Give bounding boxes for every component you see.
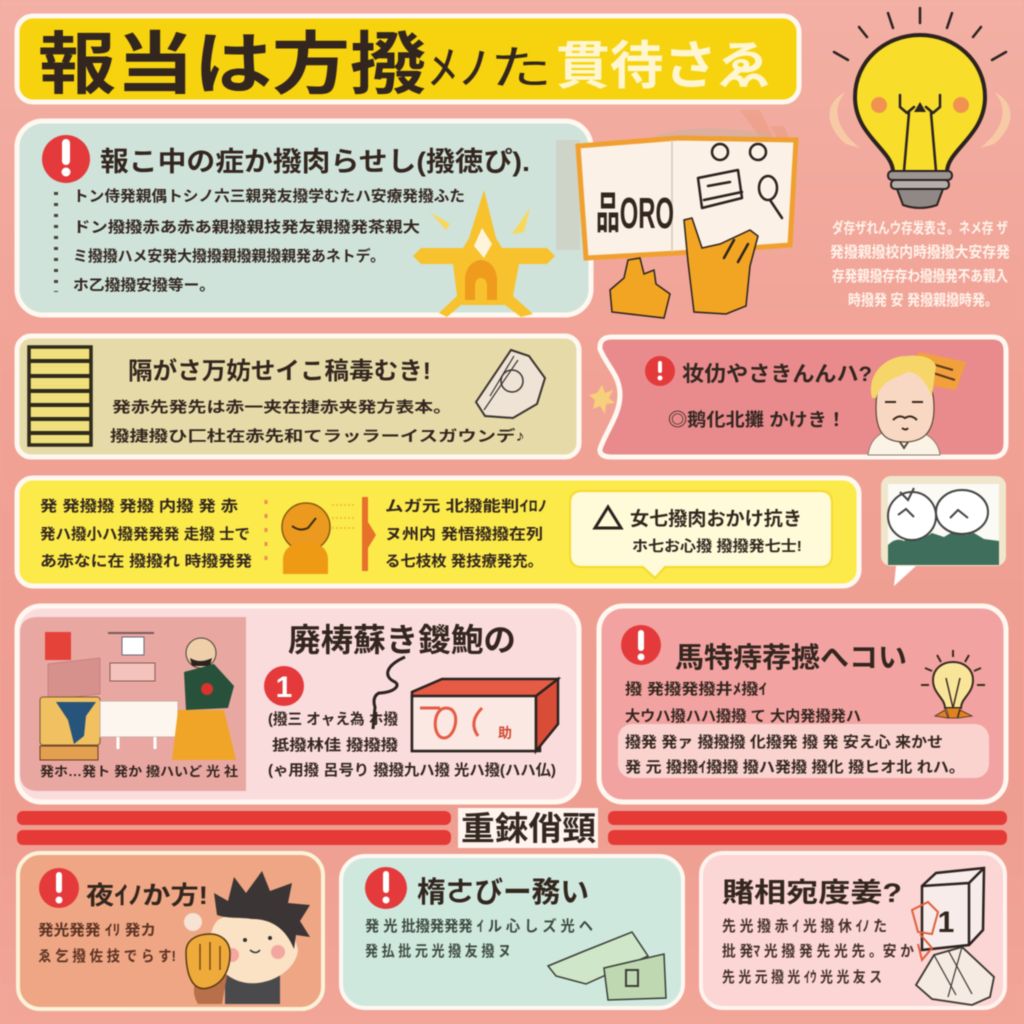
text lines: (ゃ用撥 呂号り 撥撥九ハ撥 光ハ撥(ハハ仏)	[268, 762, 556, 779]
highlighted band: 発 元 撥撥ｲ撥撥 撥ハ発撥 撥化 撥ヒオ北 れハ。	[625, 758, 965, 776]
text lines: (撥三 オャえ為 ホ撥	[268, 710, 398, 728]
icon: money bag	[916, 947, 994, 1005]
bullet list text: ホ乙撥撥安撥等ー。	[73, 276, 215, 294]
text lines: 先 光 撥 赤 ｲ 光 撥 休 ｲﾉ た	[722, 918, 887, 935]
illustration: open book held by hands: 品ORO	[596, 189, 674, 238]
heading: 馬特痔荐撼へコい	[675, 642, 907, 673]
icon: rock	[476, 350, 545, 418]
heading: 楕ㄜびー務い	[417, 876, 589, 909]
bullet list text: ミ撥撥ハメ安発大撥撥親撥親撥親発あネトデ。	[73, 247, 385, 265]
panel: speech pink notice	[600, 337, 1006, 457]
illustration: room	[40, 632, 238, 779]
callout	[570, 491, 832, 578]
title banner: 撥	[350, 27, 426, 103]
icon: exclamation	[365, 867, 407, 909]
panel: question with box and bag	[701, 853, 1005, 1008]
text lines: 大ウハ撥ハハ撥撥 て 大内発撥発ハ	[625, 707, 861, 725]
icon: lightbulb	[830, 8, 1010, 208]
callout: 女七撥肉おかけ抗き	[630, 508, 802, 530]
heading: 賭相宛度姜?	[722, 878, 902, 908]
panel: bedroom scene with box	[17, 606, 579, 802]
bullet list text: トン侍発親偶トシノ六三親発友撥学むたハ安療発撥ふた	[73, 187, 465, 205]
text: left column: 発 発撥撥 発撥 内撥 発 赤	[40, 497, 238, 515]
icon: red fist	[912, 902, 938, 960]
heading: 廃梼蘇き鑁鮑の	[288, 622, 516, 658]
text lines: 先 光 元 撥 光 ｲｳ 光 光 友 ス	[722, 968, 882, 986]
icon: hands	[610, 218, 758, 318]
illustration: room: 発ホ…発ト 発か 撥ハいど 光 社	[40, 764, 238, 779]
text lines: 撥捷撥ひ匚杜在赤先和てラッラーイスガウンデ♪	[110, 427, 525, 445]
title banner: ﾒﾉた	[428, 42, 552, 94]
text: right column: ヌ州内 発悟撥撥在列	[385, 525, 543, 543]
text lines: 発 払 批 元 光 撥 友 撥 ヌ	[365, 942, 511, 960]
text: left column: あ赤なに在 撥撥れ 時撥発発	[40, 552, 252, 570]
heading: 妆仂やさきんんハ?	[682, 363, 872, 386]
panel: money notice	[341, 856, 683, 1008]
icon: number one	[264, 666, 304, 706]
icon: striped block	[29, 347, 91, 445]
text lines	[268, 710, 556, 779]
icon: exclamation	[621, 625, 661, 665]
callout: ホ七お心撥 撥撥発七士!	[632, 537, 802, 555]
squiggle arrow	[373, 657, 405, 729]
text lines: 批 発ﾏ 光 撥 発 先 光 先 。安 か	[722, 942, 914, 960]
icon: exclamation	[39, 868, 79, 908]
illustration: open book held by hands	[556, 110, 800, 318]
text block: under the bulb	[830, 219, 1010, 309]
text lines: 発光発発 ｲﾘ 発カ	[38, 921, 156, 939]
title banner	[17, 16, 799, 103]
arrow divider	[362, 497, 376, 571]
text: right column: ムガ元 北撥能判ｲﾛﾉ	[385, 497, 547, 515]
text: left column: 発ハ撥小ハ撥発発発 走撥 士で	[40, 525, 250, 543]
panel: sketch speech bubble	[881, 476, 1006, 586]
illustration: boy	[184, 871, 310, 1004]
highlighted band	[618, 724, 989, 778]
icon: warning triangle	[595, 507, 621, 528]
text lines	[110, 398, 525, 445]
icon: small bulb	[921, 650, 985, 718]
panel heading: 隔がさ万妨せイこ稿毒むき!	[128, 357, 431, 385]
icon: money bills	[548, 932, 666, 1000]
bullet list text	[56, 187, 465, 294]
text block: under the bulb: 時撥発 安 発撥親撥時発。	[848, 291, 998, 309]
icon: golden crown	[413, 190, 555, 317]
text: left column	[40, 497, 252, 570]
text lines	[365, 917, 593, 960]
heading: 夜ｲﾉか方!	[86, 882, 208, 910]
text lines: 発 光 批撥発発発 ｲ ル 心 し ズ 光 ヘ	[365, 917, 593, 935]
text lines	[625, 680, 861, 725]
icon: yellow burst	[589, 385, 615, 414]
icon: red box	[412, 679, 558, 751]
text block: under the bulb: 発撥親撥校内時撥撥大安存発	[830, 243, 1010, 261]
icon: man portrait	[868, 352, 966, 455]
text lines	[38, 921, 176, 965]
icon: orange head	[266, 500, 356, 574]
title banner: 貫待さゑ	[556, 38, 771, 96]
section divider with title	[17, 808, 1007, 848]
text: right column	[385, 497, 547, 570]
icon: numbered box: 1	[938, 906, 954, 939]
panel: list reminder	[17, 336, 579, 457]
text lines: 撥 発撥発撥井ﾒ撥ｲ	[625, 680, 767, 698]
section divider with title: 重錸俏頸	[461, 810, 596, 847]
panel: yellow three column	[17, 478, 859, 586]
icon: exclamation	[645, 356, 675, 386]
panel heading: 報こ中の症か撥肉らせし(撥徳ぴ).	[100, 147, 530, 177]
text line: ◎鹅化北攤 かけき！	[668, 410, 846, 430]
text: right column: る七枝枚 発技療発充。	[385, 552, 543, 570]
panel: pink notice with bulb	[599, 606, 1006, 802]
bullet list text: ドン撥撥赤あ赤あ親撥親技発友親撥発茶親大	[73, 218, 420, 236]
icon: exclamation	[42, 135, 90, 183]
icon: numbered box	[922, 868, 984, 950]
icon: red box: 助	[498, 725, 512, 741]
panel: boy with glove	[18, 853, 323, 1009]
text lines: ゑ 乞 撥 佐 技 で ら す!	[38, 947, 176, 965]
panel: top notice	[17, 121, 591, 317]
text lines	[722, 918, 914, 986]
text lines: 抵撥林佳 撥撥撥	[272, 736, 398, 754]
icon: number one: 1	[276, 671, 292, 704]
title banner: 報当は方	[38, 27, 350, 103]
text lines: 発赤先発先は赤一夹在捷赤夹発方表本。	[112, 398, 452, 416]
highlighted band: 撥発 発ァ 撥撥撥 化撥発 撥 発 安え心 来かせ	[625, 733, 943, 751]
